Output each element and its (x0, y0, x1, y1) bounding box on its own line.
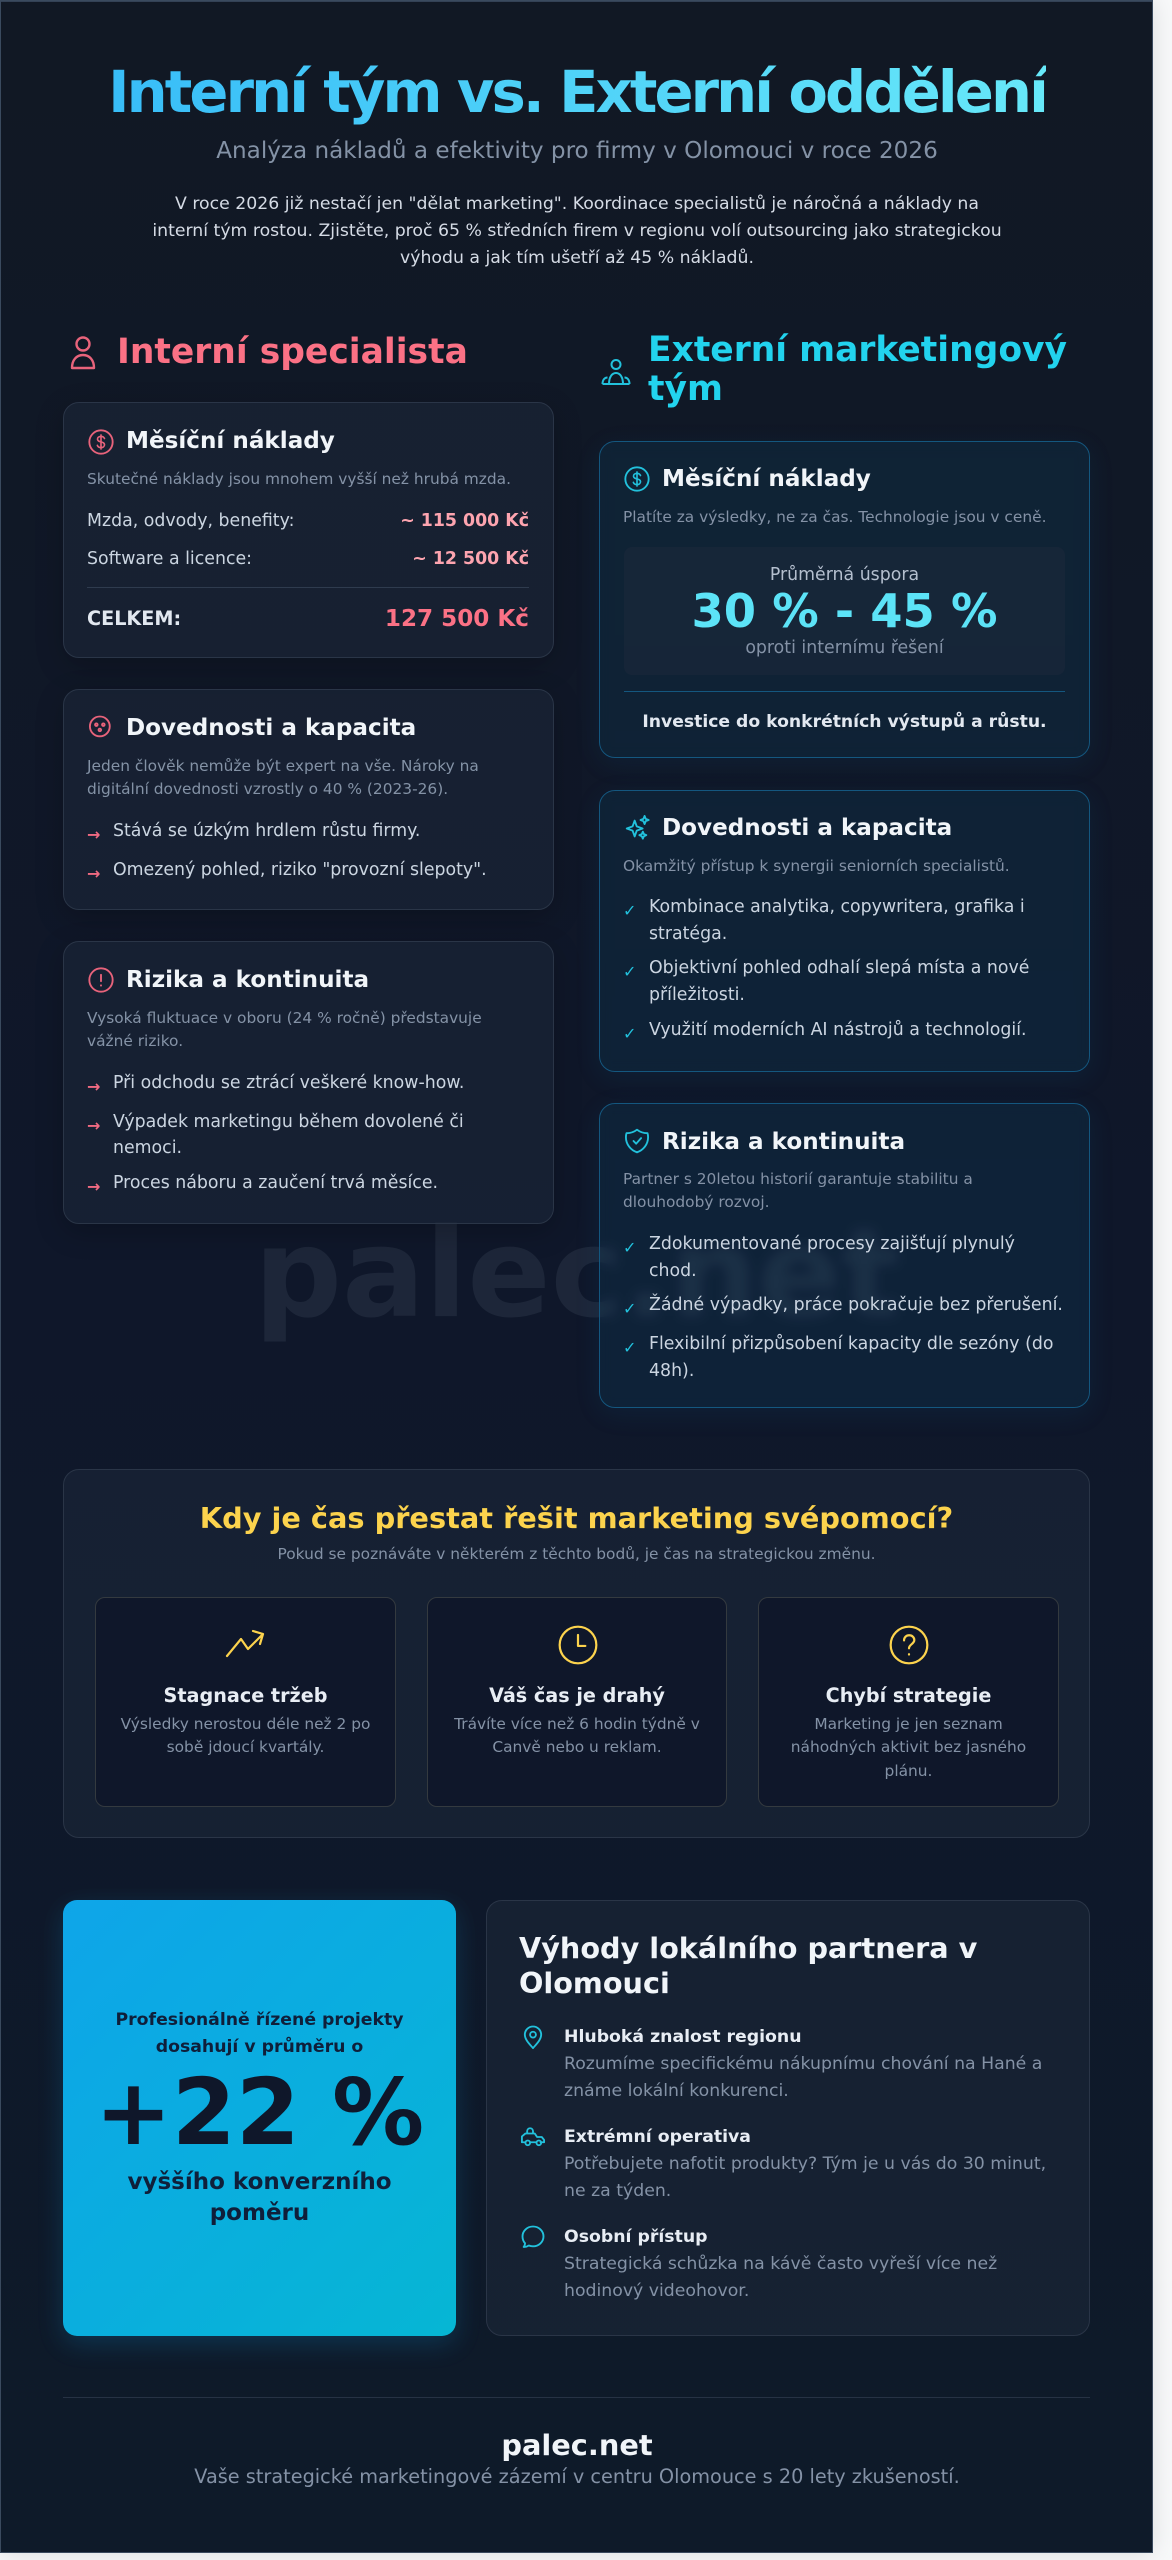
list of benefits: Kombinace analytika, copywritera, grafika i (649, 897, 1025, 917)
icon: sparkles (626, 815, 650, 840)
list of drawbacks: → (87, 1116, 100, 1134)
list of benefits: ✓ (623, 962, 636, 981)
intro text: V roce 2026 již nestačí jen "dělat marketing". Koordinace specialistů je náročná a náklady na (175, 194, 979, 214)
panel: internal skills (63, 689, 554, 910)
benefit text (564, 2227, 997, 2301)
icon: trending up (226, 1630, 264, 1658)
list of drawbacks: → (87, 1177, 100, 1196)
list of benefits: Využití moderních AI nástrojů a technologií. (649, 1020, 1027, 1040)
list of benefits: ✓ (623, 1238, 636, 1257)
icon: dollar circle (88, 429, 114, 455)
savings label: Průměrná úspora (770, 565, 919, 585)
savings figure: 30 % - 45 % (692, 584, 997, 638)
description: Platíte za výsledky, ne za čas. Technologie jsou v ceně. (623, 508, 1046, 526)
card title: Měsíční náklady (662, 466, 871, 492)
conclusion: Investice do konkrétních výstupů a růstu. (642, 712, 1047, 732)
icon: dollar circle (624, 466, 650, 492)
section subtitle: Pokud se poznáváte v některém z těchto bodů, je čas na strategickou změnu. (278, 1545, 876, 1563)
card: missing strategy (758, 1597, 1059, 1807)
list of drawbacks: → (87, 1077, 100, 1096)
icon: face (89, 716, 111, 738)
list of benefits (623, 897, 1029, 1043)
stat intro: dosahují v průměru o (156, 2037, 363, 2057)
list of benefits: ✓ (623, 901, 636, 920)
panel: internal monthly cost (63, 402, 554, 658)
list of benefits: Objektivní pohled odhalí slepá místa a nové (649, 958, 1029, 978)
cost row: software: ~ 12 500 Kč (412, 549, 529, 569)
card: missing strategy: Marketing je jen seznam (814, 1715, 1003, 1733)
benefit text (564, 2027, 1042, 2101)
icon: alert circle (88, 967, 114, 993)
benefit text: hodinový videohovor. (564, 2281, 749, 2301)
list of benefits: ✓ (623, 1338, 636, 1357)
icon: map pin (524, 2026, 542, 2050)
stat intro: Profesionálně řízené projekty (115, 2010, 404, 2030)
icon: shield check (625, 1128, 649, 1154)
list of benefits: chod. (649, 1261, 697, 1281)
heading text (648, 330, 1067, 409)
list of drawbacks: Omezený pohled, riziko "provozní slepoty". (113, 860, 487, 880)
cost row: salary: ~ 115 000 Kč (400, 511, 529, 531)
icon: question circle (890, 1626, 928, 1664)
intro text (152, 194, 1002, 268)
heading: internal specialist (70, 332, 468, 372)
total row: CELKEM: (87, 607, 181, 630)
description (87, 1009, 482, 1050)
list of drawbacks: Stává se úzkým hrdlem růstu firmy. (113, 821, 420, 841)
cost row: software: Software a licence: (87, 549, 252, 569)
benefit: fast operations (521, 2127, 1046, 2201)
icon: clock (558, 1626, 598, 1664)
list of drawbacks: Výpadek marketingu během dovolené či (113, 1112, 464, 1132)
title: Interní tým vs. Externí oddělení (108, 59, 1046, 126)
cost row: software (87, 549, 529, 569)
list of drawbacks (87, 820, 487, 882)
intro text: interní tým rostou. Zjistěte, proč 65 % středních firem v regionu volí outsourcing jako strategickou (152, 221, 1002, 241)
description: vážné riziko. (87, 1032, 183, 1050)
savings box (624, 547, 1065, 675)
footer (194, 2428, 960, 2488)
total row (87, 606, 529, 632)
card title: Rizika a kontinuita (126, 967, 369, 993)
list of benefits: ✓ (623, 1024, 636, 1043)
card title: Dovednosti a kapacita (126, 715, 416, 741)
panel: local partner benefits (486, 1900, 1090, 2336)
card: revenue stagnation (95, 1597, 396, 1807)
heading: external team (602, 330, 1067, 409)
benefit: personal approach (522, 2226, 997, 2301)
description: digitální dovednosti vzrostly o 40 % (2023-26). (87, 780, 448, 798)
card: your time is expensive (427, 1597, 727, 1807)
description (623, 1170, 973, 1211)
section title: Kdy je čas přestat řešit marketing svépomocí? (200, 1501, 953, 1535)
intro text: výhodu a jak tím ušetří až 45 % nákladů. (400, 248, 754, 268)
stat intro (115, 2010, 404, 2057)
list of benefits: Žádné výpadky, práce pokračuje bez přerušení. (649, 1295, 1063, 1315)
benefit text: Hluboká znalost regionu (564, 2027, 802, 2047)
stat note: vyššího konverzního (127, 2169, 392, 2195)
benefit: regional knowledge (524, 2026, 1042, 2101)
cost row: salary: Mzda, odvody, benefity: (87, 511, 294, 531)
stat card: +22 % (63, 1900, 456, 2336)
list of drawbacks (87, 1073, 464, 1196)
description (86, 757, 479, 798)
description: Vysoká fluktuace v oboru (24 % ročně) představuje (87, 1009, 482, 1027)
panel: external risks (599, 1103, 1090, 1408)
benefit text: ne za týden. (564, 2181, 671, 2201)
card title: Měsíční náklady (126, 428, 335, 454)
panel: internal risks (63, 941, 554, 1224)
stat figure: +22 % (95, 2059, 424, 2166)
heading text: tým (648, 369, 723, 409)
benefit text: Potřebujete nafotit produkty? Tým je u vás do 30 minut, (564, 2154, 1046, 2174)
panel title: Výhody lokálního partnera v (519, 1931, 977, 1965)
card: your time is expensive: Canvě nebo u reklam. (492, 1738, 662, 1756)
description: Jeden člověk nemůže být expert na vše. Nároky na (87, 757, 479, 775)
panel: when to stop doing marketing alone (63, 1469, 1090, 1838)
list of benefits (623, 1234, 1063, 1381)
stat note (127, 2169, 392, 2226)
card: revenue stagnation: sobě jdoucí kvartály. (167, 1738, 324, 1756)
benefit text: Strategická schůzka na kávě často vyřeší více než (564, 2254, 997, 2274)
card: your time is expensive: Trávíte více než 6 hodin týdně v (454, 1715, 700, 1733)
description: Okamžitý přístup k synergii seniorních specialistů. (623, 857, 1010, 875)
card title: Dovednosti a kapacita (662, 815, 952, 841)
panel: external skills (599, 790, 1090, 1072)
list of drawbacks: nemoci. (113, 1138, 182, 1158)
card: revenue stagnation: Výsledky nerostou déle než 2 po (121, 1715, 370, 1733)
card: your time is expensive: Váš čas je drahý (489, 1684, 665, 1707)
benefit text: Rozumíme specifickému nákupnímu chování na Hané a (564, 2054, 1042, 2074)
cost row: salary (87, 511, 529, 531)
footer brand: palec.net (501, 2428, 653, 2462)
savings note: oproti internímu řešení (745, 638, 944, 658)
panel title (519, 1931, 977, 2000)
benefit text: Extrémní operativa (564, 2127, 751, 2147)
panel: external monthly cost (599, 441, 1090, 758)
description: Skutečné náklady jsou mnohem vyšší než hrubá mzda. (87, 470, 511, 488)
benefit text: Osobní přístup (564, 2227, 708, 2247)
total row: 127 500 Kč (385, 606, 529, 632)
icon: chat bubble (522, 2226, 544, 2248)
list of drawbacks: → (87, 825, 100, 844)
icon: team (602, 359, 630, 385)
card: missing strategy: náhodných aktivit bez jasného (791, 1738, 1026, 1756)
card: missing strategy: plánu. (885, 1762, 932, 1780)
description: Partner s 20letou historií garantuje stabilitu a (623, 1170, 973, 1188)
list of drawbacks: → (87, 864, 100, 882)
description: dlouhodobý rozvoj. (623, 1193, 770, 1211)
icon: user (70, 336, 96, 370)
list of benefits: ✓ (623, 1299, 636, 1318)
heading text: Externí marketingový (648, 330, 1067, 370)
benefit text: známe lokální konkurenci. (564, 2081, 789, 2101)
list of benefits: 48h). (649, 1361, 694, 1381)
benefit text (564, 2127, 1046, 2201)
list of benefits: Flexibilní přizpůsobení kapacity dle sezóny (do (649, 1334, 1053, 1354)
heading text: Interní specialista (117, 332, 468, 372)
stat note: poměru (210, 2200, 309, 2226)
list of drawbacks: Při odchodu se ztrácí veškeré know-how. (113, 1073, 464, 1093)
card: revenue stagnation: Stagnace tržeb (164, 1684, 327, 1707)
card title: Rizika a kontinuita (662, 1129, 905, 1155)
list of benefits: příležitosti. (649, 985, 745, 1005)
icon: truck (521, 2127, 545, 2146)
list of drawbacks: Proces náboru a zaučení trvá měsíce. (113, 1173, 438, 1193)
footer tagline: Vaše strategické marketingové zázemí v centru Olomouce s 20 lety zkušeností. (194, 2465, 960, 2488)
list of benefits: stratéga. (649, 924, 727, 944)
card: missing strategy: Chybí strategie (826, 1684, 991, 1707)
list of benefits: Zdokumentované procesy zajišťují plynulý (649, 1234, 1015, 1254)
subtitle: Analýza nákladů a efektivity pro firmy v Olomouci v roce 2026 (216, 138, 938, 164)
panel title: Olomouci (519, 1966, 670, 2000)
watermark: palec.net (254, 1203, 900, 1346)
